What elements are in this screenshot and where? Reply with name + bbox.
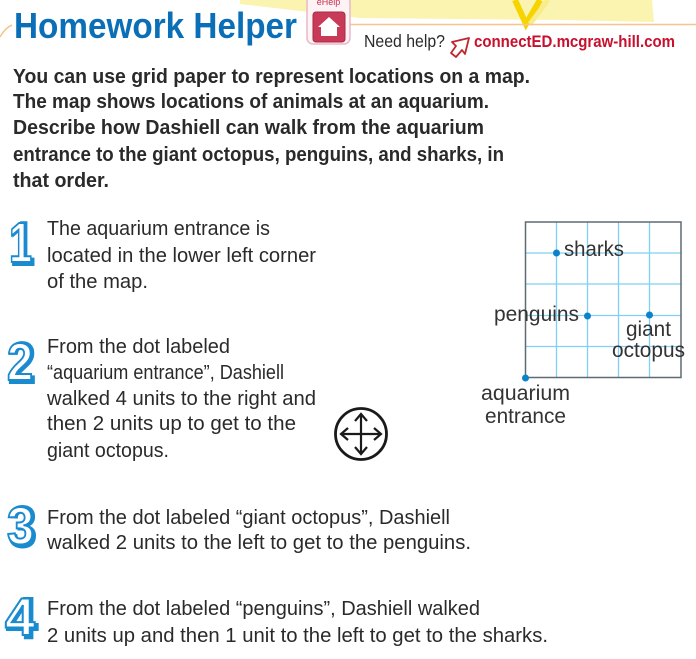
step 1 text: located in the lower left corner [47,244,316,267]
title: Homework Helper [14,5,297,46]
dot: aquarium entrance [522,374,529,382]
icon: cursor arrow [451,38,469,57]
icon: eHelp home button [307,0,350,44]
website link: connectED.mcgraw-hill.com [474,33,675,51]
label: giant octopus [612,318,685,362]
label: penguins: penguins [494,303,579,326]
step 3 text: From the dot labeled “giant octopus”, Dashiell [47,506,450,529]
step 4 text: From the dot labeled “penguins”, Dashiell walked [47,597,480,620]
label: giant octopus: octopus [612,339,685,362]
step 4 text [47,597,548,647]
step 3 text: walked 2 units to the left to get to the penguins. [46,531,471,554]
header rule [0,24,696,37]
dot: penguins [584,312,591,320]
step 1 text [47,217,316,293]
intro paragraph [13,65,530,192]
intro paragraph: The map shows locations of animals at an aquarium. [13,90,489,113]
step 1 number: 1 [9,211,32,275]
label: aquarium entrance: aquarium [481,382,570,405]
header yellow wash [240,0,654,24]
step 2 text: “aquarium entrance”, Dashiell [47,361,284,384]
map grid [481,222,685,428]
label: aquarium entrance: entrance [485,405,566,428]
dot: giant octopus [646,312,653,318]
step 1 number: 1 [10,210,35,279]
step 3 number: 3 [8,495,37,560]
step 4 number: 4 [5,588,36,647]
step 2 number: 2 [7,333,33,392]
step 3 text [46,506,471,554]
step 1 text: of the map. [47,270,148,293]
step 2 text: then 2 units up to get to the [47,412,296,435]
step 2 text: walked 4 units to the right and [46,387,316,410]
label: aquarium entrance [481,382,570,428]
step 4 number: 4 [6,586,38,651]
step 4 text: 2 units up and then 1 unit to the left to get to the sharks. [47,624,548,647]
intro paragraph: that order. [13,169,109,192]
step 1 text: The aquarium entrance is [47,217,270,240]
label: sharks: sharks [564,238,624,261]
need help label: Need help? [364,31,445,51]
step 2 text [46,335,316,462]
step 2 number: 2 [8,331,36,396]
dot: sharks [553,250,560,256]
intro paragraph: Describe how Dashiell can walk from the aquarium [13,116,484,139]
intro paragraph: entrance to the giant octopus, penguins, and sharks, in [13,143,504,166]
label: giant octopus: giant [626,318,671,341]
intro paragraph: You can use grid paper to represent locations on a map. [13,65,530,88]
step 2 text: giant octopus. [47,439,169,462]
icon: four-way arrows [336,408,386,460]
step 2 text: From the dot labeled [47,335,230,358]
step 3 number: 3 [7,497,34,556]
